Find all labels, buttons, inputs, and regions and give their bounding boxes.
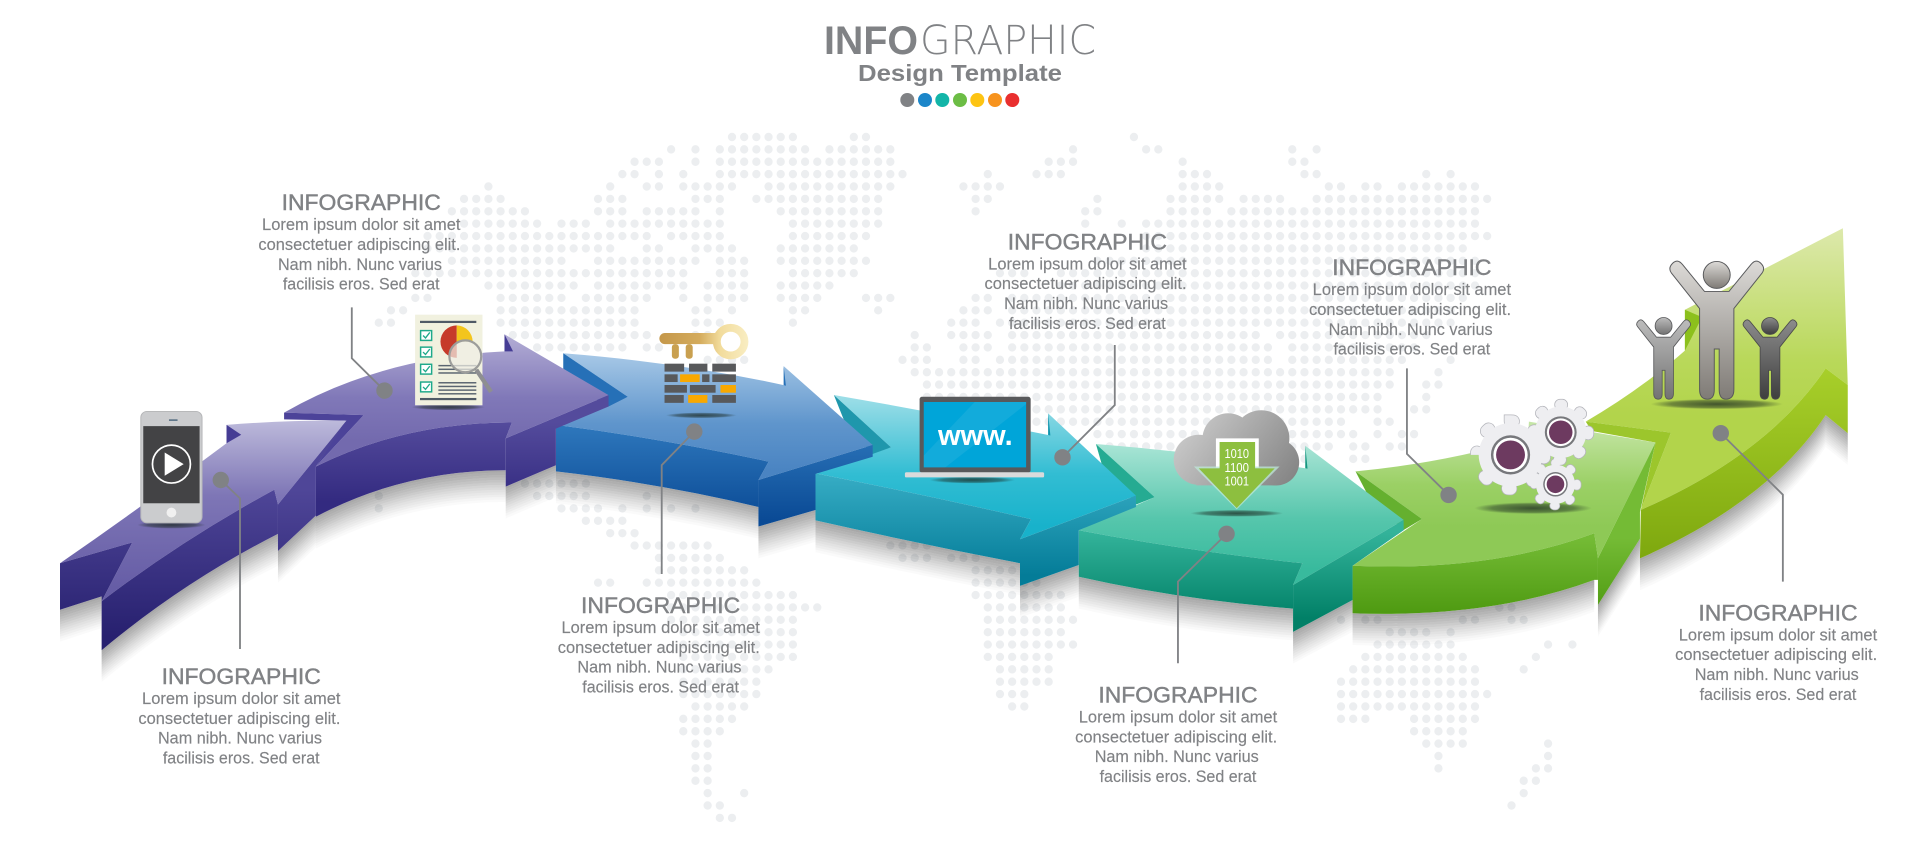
- text block 3: consectetuer adipiscing elit.: [558, 639, 760, 657]
- leader line 5: [1178, 526, 1235, 663]
- icon: key and brick wall: [659, 328, 744, 418]
- text block 1: INFOGRAPHIC: [162, 664, 321, 689]
- text block 1: consectetuer adipiscing elit.: [138, 710, 340, 728]
- arrow 6: green: [1353, 422, 1656, 614]
- text block 2: Nam nibh. Nunc varius: [278, 256, 442, 274]
- text block 6: [1309, 255, 1511, 359]
- text block 6: facilisis eros. Sed erat: [1333, 341, 1491, 359]
- leader line 6: [1407, 368, 1457, 503]
- icon: laptop with www: [905, 397, 1044, 483]
- arrow 3: blue: [556, 353, 873, 527]
- text block 3: Lorem ipsum dolor sit amet: [561, 619, 760, 637]
- text block 7: INFOGRAPHIC: [1698, 600, 1858, 625]
- text block 4: Nam nibh. Nunc varius: [1004, 295, 1168, 313]
- text block 3: [558, 593, 760, 697]
- text block 7: Nam nibh. Nunc varius: [1695, 666, 1859, 684]
- text block 2: INFOGRAPHIC: [282, 190, 441, 215]
- title: INFO: [824, 19, 918, 63]
- text block 3: facilisis eros. Sed erat: [582, 679, 739, 697]
- text block 5: consectetuer adipiscing elit.: [1075, 728, 1277, 746]
- text block 4: consectetuer adipiscing elit.: [984, 275, 1187, 293]
- leader line 7: [1713, 425, 1783, 582]
- text block 2: Lorem ipsum dolor sit amet: [262, 216, 461, 234]
- text block 1: [138, 664, 341, 768]
- arrow 1: lilac: [60, 421, 347, 650]
- world map dot background: [379, 137, 1574, 818]
- text block 2: facilisis eros. Sed erat: [283, 276, 440, 294]
- arrow reflections: [60, 415, 1848, 682]
- text block 1: Nam nibh. Nunc varius: [158, 730, 322, 748]
- text block 4: INFOGRAPHIC: [1008, 229, 1167, 254]
- leader line 2: [352, 307, 393, 399]
- text block 1: Lorem ipsum dolor sit amet: [142, 690, 341, 708]
- text block 4: [984, 229, 1187, 333]
- text block 3: Nam nibh. Nunc varius: [577, 659, 741, 677]
- title: [824, 18, 1096, 64]
- icon: cloud download: 1100: [1224, 460, 1249, 475]
- subtitle: Design Template: [858, 60, 1062, 86]
- text block 6: consectetuer adipiscing elit.: [1309, 301, 1511, 319]
- text block 7: [1675, 600, 1878, 704]
- arrow 7: lime: [1586, 228, 1848, 558]
- icon: people with raised arms: [1637, 261, 1797, 409]
- text block 7: consectetuer adipiscing elit.: [1675, 646, 1877, 664]
- icon: smartphone: [137, 411, 206, 529]
- text block 5: facilisis eros. Sed erat: [1100, 768, 1257, 786]
- icon: cloud download: 1001: [1224, 474, 1249, 489]
- icon: laptop with www: www.: [937, 420, 1013, 452]
- leader line 1: [213, 472, 240, 649]
- text block 7: Lorem ipsum dolor sit amet: [1679, 626, 1878, 644]
- text block 5: INFOGRAPHIC: [1098, 682, 1258, 707]
- title: GRAPHIC: [920, 18, 1096, 64]
- text block 4: facilisis eros. Sed erat: [1009, 315, 1166, 333]
- text block 5: Nam nibh. Nunc varius: [1095, 748, 1259, 766]
- text block 2: consectetuer adipiscing elit.: [258, 236, 460, 254]
- icon: gears: [1474, 405, 1592, 514]
- leader line 3: [662, 423, 702, 574]
- arrow 5: sea green: [1079, 444, 1404, 632]
- text block 5: Lorem ipsum dolor sit amet: [1079, 708, 1278, 726]
- text block 1: facilisis eros. Sed erat: [163, 750, 320, 768]
- icon: checklist report with magnifier: [411, 315, 491, 410]
- text block 4: Lorem ipsum dolor sit amet: [988, 255, 1187, 273]
- text block 3: INFOGRAPHIC: [581, 593, 740, 618]
- text block 6: Lorem ipsum dolor sit amet: [1313, 281, 1511, 299]
- arrow 2: violet: [284, 334, 609, 517]
- text block 7: facilisis eros. Sed erat: [1700, 686, 1857, 704]
- icon: cloud download: [1174, 410, 1299, 517]
- icon: cloud download: 1010: [1224, 446, 1249, 461]
- text block 5: [1075, 682, 1278, 786]
- text block 6: Nam nibh. Nunc varius: [1329, 321, 1493, 339]
- arrow 4: teal: [816, 395, 1136, 586]
- text block 2: [258, 190, 461, 294]
- text block 6: INFOGRAPHIC: [1332, 255, 1492, 280]
- leader line 4: [1054, 345, 1115, 466]
- colour dots row: [900, 93, 1019, 107]
